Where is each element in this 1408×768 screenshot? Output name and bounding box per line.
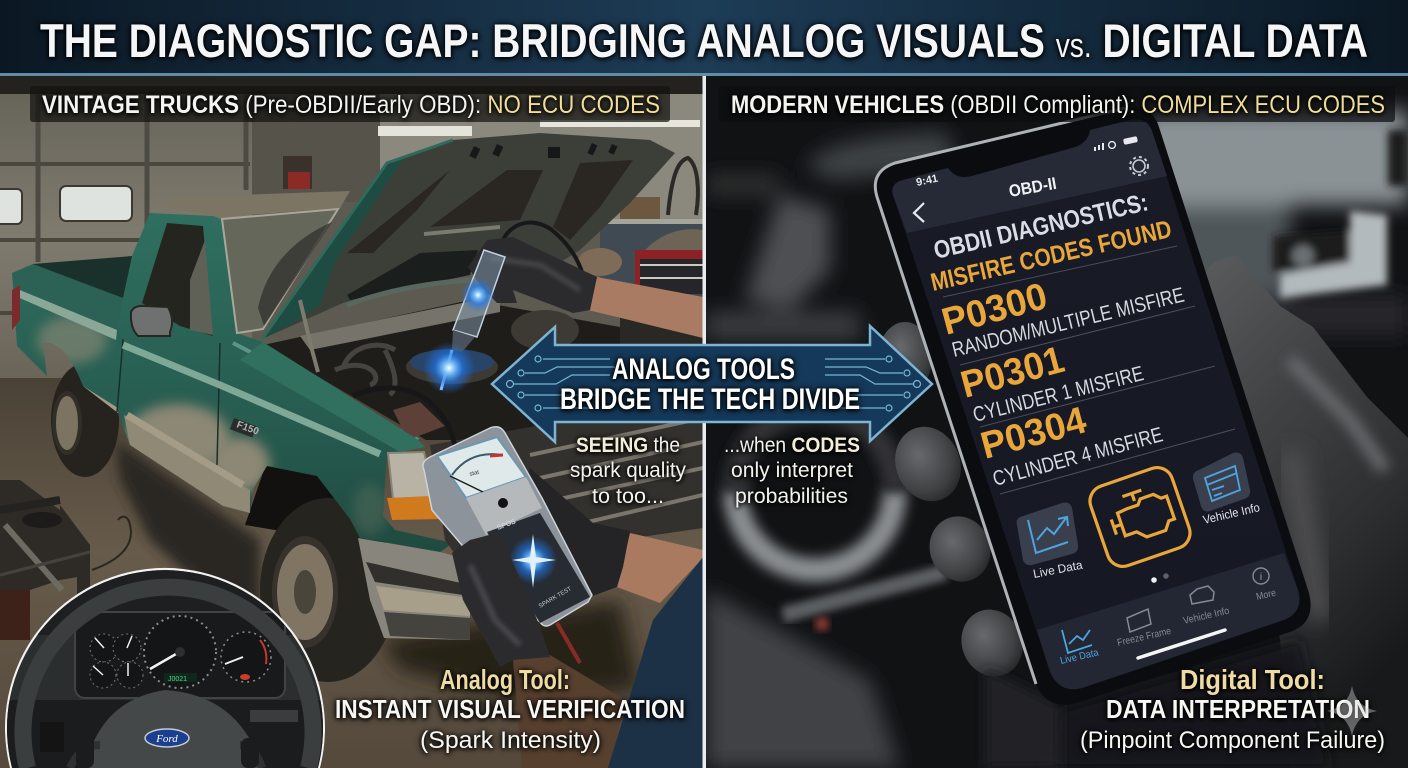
black glove [468,237,597,313]
analog spark meter in hand: SPOS [496,518,517,532]
app title: OBD-II [1007,174,1058,201]
phone showing OBD-II app [875,107,1311,705]
hood inner panels [347,160,633,253]
vehicle info tile [1193,453,1261,527]
phone screen [892,119,1299,689]
banner text: ANALOG TOOLS [612,353,795,386]
meter knob band [466,477,542,535]
code P0301 [956,339,1146,427]
workshop shelf and red toolbox [578,158,703,294]
test cable [503,223,582,272]
screen top bar [892,119,1167,233]
home indicator [1138,630,1225,658]
F150 badge: F150 [235,419,261,438]
right centre caption: ...when CODES [724,434,860,457]
blurred steering ring [735,490,895,570]
left centre caption: to too... [592,485,664,508]
front wheel [260,498,396,682]
meter cable [353,388,456,450]
shop floor [0,378,703,768]
digital tool caption: Digital Tool: [1180,664,1325,695]
code P0300: P0300 [937,275,1052,344]
tab: live data: Live Data [1059,647,1100,667]
instrument cluster: J0021 [168,676,187,683]
live data tile [1017,503,1084,581]
door seams and stripes [117,339,220,465]
tab: vehicle info [1182,586,1231,627]
banner text: BRIDGE THE TECH DIVIDE [560,383,860,416]
chrome and tan bumper [358,538,470,640]
check engine icon [1086,463,1194,571]
windshield [222,209,338,333]
digital tool caption: DATA INTERPRETATION [1106,694,1370,724]
green pickup truck [12,191,470,682]
fender over bay [240,342,425,452]
header bar with title [0,0,1408,76]
ford badge [145,729,189,747]
banner text [560,353,860,416]
left glove [452,533,550,667]
right gloved hand behind phone [1040,256,1408,768]
rear wheel [51,363,119,477]
settings gear [1130,157,1148,175]
tab: more [1253,568,1278,603]
analog tool caption [335,664,685,754]
tab: live data [1059,630,1100,667]
analog spark meter in hand: stat [469,470,480,478]
right centre caption: only interpret [731,459,853,482]
left gloved fingers [878,322,1060,768]
blurred interior background [706,76,1408,768]
analog tool caption: INSTANT VISUAL VERIFICATION [335,694,685,724]
code P0301: CYLINDER 1 MISFIRE [971,362,1146,427]
list dividers [943,246,1235,494]
right centre caption: probabilities [735,485,848,508]
hood prop rod [300,300,318,372]
dash panel lower [0,700,340,768]
right panel heading: MODERN VEHICLES (OBDII Compliant): COMPLEX ECU CODES [731,91,1385,119]
cab roof [152,191,350,217]
spark tester probe [453,250,505,337]
title: THE DIAGNOSTIC GAP: BRIDGING ANALOG VISUALS vs. DIGITAL DATA [40,14,1368,67]
analog spark meter in hand [353,388,703,768]
meter dark panel [487,513,590,623]
blurred air vent [1273,130,1408,298]
truck bed [33,256,132,298]
inset: dashboard and steering wheel [0,560,340,768]
right centre caption [724,434,860,508]
diagnostics heading: OBDII DIAGNOSTICS: [931,188,1151,265]
phone body [875,107,1311,705]
dust patches on body [37,316,388,536]
analog spark meter in hand: SPARK TEST [538,586,573,610]
open engine bay [266,298,702,552]
right glove [520,468,630,597]
tab: vehicle info: Vehicle Info [1182,606,1231,627]
center double arrow banner [492,326,932,442]
sparkle watermark [1327,686,1377,736]
red test lead [557,623,580,663]
tab: freeze frame: Freeze Frame [1116,626,1173,649]
truck body [12,213,453,552]
blurred console strip [783,572,946,615]
radiator and grille bars [430,423,702,552]
circuit traces right [825,356,920,411]
meter housing [423,427,592,626]
code P0304: CYLINDER 4 MISFIRE [990,423,1165,491]
status time: 9:41 [915,173,939,189]
digital tool caption [1080,664,1385,754]
digital tool caption: (Pinpoint Component Failure) [1080,727,1385,754]
left centre caption: spark quality [570,459,686,482]
instrument cluster [75,612,285,698]
analog tool caption: Analog Tool: [440,664,570,695]
analog tool caption: (Spark Intensity) [420,727,601,754]
tool bench with wrenches [0,480,90,640]
steering wheel [23,587,313,768]
misfire heading: MISFIRE CODES FOUND [928,215,1174,297]
wheel arch shadow [245,466,334,530]
carousel dots [1151,573,1169,583]
code P0300: RANDOM/MULTIPLE MISFIRE [950,284,1187,362]
tab: more: More [1255,588,1278,603]
left centre caption: SEEING the [576,434,680,457]
code P0301: P0301 [956,339,1069,407]
silver bezel edge [875,108,1125,684]
lower forearms and shirt [513,655,625,768]
vehicle info tile: Vehicle Info [1202,500,1261,527]
live data tile: Live Data [1032,558,1084,581]
meter spark star [509,534,557,588]
panel: vintage trucks garage scene [0,76,703,768]
panel: modern vehicle interior [706,76,1408,768]
upper hand holding spark tester [423,223,703,394]
code P0304: P0304 [976,399,1091,468]
bottom tab bar [1037,553,1299,689]
meter dial face [437,437,526,498]
tab: more: i [1260,572,1262,583]
left centre caption [570,434,686,508]
blue spark glow [461,278,495,312]
back chevron [914,203,924,222]
ford badge: Ford [155,733,178,745]
hood vents [469,143,617,159]
forearm [588,277,703,338]
raised truck hood [240,133,675,452]
status icons [1094,136,1138,151]
code P0304 [976,399,1165,491]
tab: freeze frame [1116,609,1173,649]
headlight and indicator [388,452,434,499]
circuit traces left [506,356,615,411]
cab door window [142,223,213,336]
side mirror [131,306,172,336]
center divider line [702,76,706,768]
garage wall background [0,76,703,396]
left panel heading: VINTAGE TRUCKS (Pre-OBDII/Early OBD): NO ECU CODES [42,91,660,119]
